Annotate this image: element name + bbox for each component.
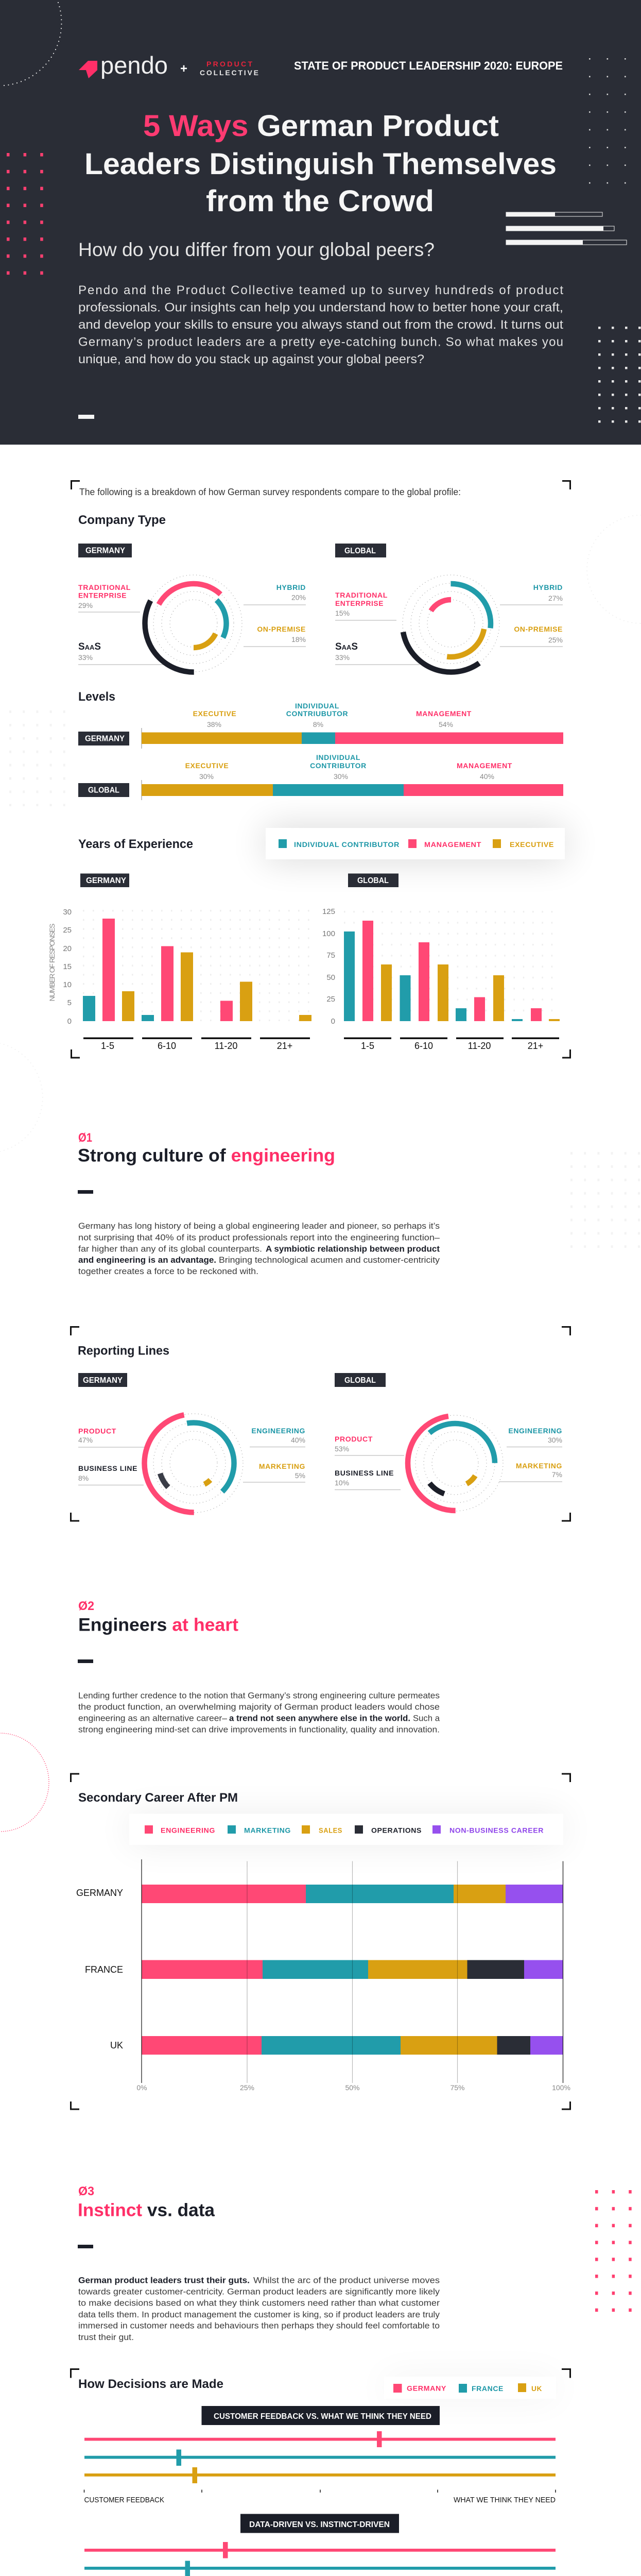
badge: global [335,1373,386,1387]
heading: How Decisions are Made [78,2377,223,2391]
grid and axis [136,1859,570,2092]
dash [78,1659,93,1663]
logo: product collective [200,60,258,77]
labels [335,583,563,662]
uk bar: UK [110,2040,123,2050]
badge: global [348,874,399,887]
badge: germany: GERMANY [83,1376,123,1385]
legend [129,1814,563,1845]
y axis labels: 125 [322,907,335,916]
paragraph: Whilst the arc of the product universe moves [253,2275,440,2285]
labels: 33% [78,653,93,662]
number: Ø2 [78,1599,94,1613]
france bar [85,1960,563,1979]
y axis title: NUMBER OF RESPONSES [48,923,56,1002]
heading: Instinct vs. data [78,2200,215,2221]
intro paragraph [78,283,563,366]
logo: pendo [79,52,187,79]
paragraph: trust their gut. [78,2332,134,2342]
paragraph [78,1221,440,1276]
paragraph: A symbiotic relationship between product [266,1244,440,1254]
labels [335,1427,562,1487]
labels: ENTERPRISE [335,599,384,607]
category axis: 11-20 [468,1041,491,1051]
levels chart: global: 40% [480,772,494,781]
labels: 7% [552,1470,562,1479]
labels: 25% [548,636,563,644]
decorative dotted arc [0,1733,49,1832]
legend: years of experience: EXECUTIVE [510,840,554,849]
labels: TRADITIONAL [335,591,388,599]
y axis labels: 100 [322,929,335,938]
labels: 15% [335,609,350,617]
legend: years of experience: INDIVIDUAL CONTRIBUTOR [294,840,400,849]
paragraph: and engineering is an advantage. [78,1255,216,1265]
levels chart: germany: CONTRIUBUTOR [286,709,348,718]
category axis: 21+ [277,1041,292,1051]
labels: ENGINEERING [508,1427,562,1435]
levels chart: germany: EXECUTIVE [193,709,236,718]
legend: ENGINEERING [161,1826,215,1834]
paragraph: data tells them. In product management the customer is king, so if product leaders are truly [78,2310,440,2319]
labels: PRODUCT [335,1435,373,1443]
germany bar: GERMANY [76,1888,123,1898]
badge: global: GLOBAL [357,876,389,885]
legend: FRANCE [472,2384,504,2393]
paragraph: strong engineering mind-set can drive improvements in functionality, quality and innovation. [78,1725,440,1734]
legend: years of experience: MANAGEMENT [424,840,481,849]
labels: 29% [78,601,93,609]
labels: 10% [335,1479,349,1487]
badge: global: GLOBAL [344,1376,376,1385]
labels [78,583,306,662]
legend: SALES [319,1826,342,1834]
grid and axis: 50% [345,2083,360,2092]
intro paragraph: unique, and how do you stack up against your global peers? [78,352,424,366]
paragraph: Lending further credence to the notion that Germany’s strong engineering culture permeates [78,1691,440,1700]
grid and axis: 25% [240,2083,254,2092]
legend: GERMANY [407,2384,446,2393]
y axis labels: 0 [331,1017,335,1026]
heading: Secondary Career After PM [78,1791,238,1805]
levels chart: germany: 54% [439,720,453,728]
labels: TRADITIONAL [78,583,131,591]
labels [78,1427,305,1482]
y axis labels: 50 [326,973,335,982]
grid and axis: 100% [552,2083,570,2092]
section 03 [78,2184,632,2342]
scale chart: customer feedback: CUSTOMER FEEDBACK VS. WHAT WE THINK THEY NEED [214,2412,431,2421]
intro paragraph: professionals. Our insights can help you understand how to better hone your craft, [78,301,563,314]
panel: secondary career [71,1774,570,2109]
section 02 [0,1599,440,1832]
corner brackets [71,481,570,1058]
subtitle: How do you differ from your global peers? [78,239,435,260]
levels chart: global: INDIVIDUAL [316,753,360,761]
paragraph: far higher than any of its global counterparts. [78,1244,262,1254]
intro paragraph: Pendo and the Product Collective teamed up to survey hundreds of product [78,283,563,297]
levels chart: germany: INDIVIDUAL [295,702,339,710]
levels chart: germany: GERMANY [85,735,125,743]
levels chart: germany: 38% [207,720,221,728]
y axis labels: 25 [326,995,335,1004]
panel: reporting lines [71,1327,570,1521]
y axis labels: 15 [63,962,72,971]
paragraph [78,1691,440,1734]
levels chart: global: MANAGEMENT [457,761,512,770]
decorative dots [595,2190,632,2312]
y axis labels: 0 [67,1017,72,1026]
labels: MARKETING [259,1462,305,1470]
heading: Reporting Lines [78,1344,169,1358]
labels: 33% [335,653,350,662]
badge: germany [78,1373,127,1387]
paragraph: Bringing technological acumen and customer-centricity [219,1255,440,1265]
legend [384,2377,556,2399]
badge: germany: GERMANY [86,876,126,885]
paragraph: a trend not seen anywhere else in the world. [229,1714,410,1723]
germany bar [76,1885,563,1903]
labels: ON-PREMISE [514,625,563,633]
paragraph: the product function, an overwhelming majority of German product leaders would chose [78,1702,440,1711]
decorative progress bars [506,212,627,245]
dash [78,2245,93,2248]
badge: germany [78,544,132,557]
levels chart: global [78,753,563,800]
logo: product collective: PRODUCT [206,60,252,68]
labels: 20% [291,594,306,602]
badge: global: GLOBAL [344,547,376,555]
corner brackets [71,1327,570,1521]
panel: demographics [48,481,570,1058]
scale chart: customer feedback: WHAT WE THINK THEY NEED [454,2496,556,2504]
category axis [344,1038,559,1051]
badge: germany: GERMANY [85,546,125,555]
title: Leaders Distinguish Themselves [84,147,557,181]
heading: Engineers at heart [78,1615,238,1635]
labels: ON-PREMISE [257,625,306,633]
y axis labels [63,908,72,1026]
labels: SaaS [335,641,358,652]
category axis [83,1038,310,1051]
badge: global [335,544,386,557]
category axis: 11-20 [215,1041,237,1051]
panel: how decisions are made [71,2369,570,2576]
labels: 40% [291,1436,305,1444]
paragraph: engineering as an alternative career– [78,1714,228,1723]
labels: BUSINESS LINE [78,1464,137,1472]
labels: ENGINEERING [251,1427,305,1435]
levels chart: germany: MANAGEMENT [416,709,472,718]
uk bar [110,2036,563,2055]
labels: BUSINESS LINE [335,1469,394,1477]
scale chart: data driven [84,2514,556,2576]
category axis: 1-5 [101,1041,114,1051]
intro paragraph: Germany’s product leaders are a pretty eye-catching bunch. So what makes you [78,335,563,349]
logo: product collective: COLLECTIVE [200,69,258,77]
levels chart: global: EXECUTIVE [185,761,229,770]
number: Ø1 [78,1131,92,1145]
report label: STATE OF PRODUCT LEADERSHIP 2020: EUROPE [294,59,563,72]
faint background decoration [0,515,641,2576]
bar chart: experience germany [48,908,312,1051]
labels: 53% [335,1445,349,1453]
scale chart: customer feedback: CUSTOMER FEEDBACK [84,2496,164,2504]
heading: company type: Company Type [78,513,166,527]
labels: HYBRID [276,583,306,591]
labels: PRODUCT [78,1427,116,1435]
paragraph: immersed in customer needs and behaviours then perhaps they should feel comfortable to [78,2320,440,2331]
paragraph [78,2275,440,2342]
dash [78,415,94,419]
levels chart: germany: 8% [313,720,323,728]
section 01 [78,1131,440,1276]
scale chart: customer feedback [84,2406,556,2504]
corner brackets [71,1774,570,2109]
donut: company type germany [78,569,306,677]
y axis labels: 10 [63,980,72,989]
paragraph: Such a [413,1714,440,1723]
levels chart: global: CONTRIBUTOR [310,761,367,770]
y axis labels [322,907,335,1026]
legend: NON-BUSINESS CAREER [449,1826,544,1834]
labels: MARKETING [516,1462,562,1470]
dash [78,1190,93,1194]
heading: levels: Levels [78,690,115,704]
y axis labels: 75 [326,951,335,960]
intro paragraph: and develop your skills to ensure you always stand out from the crowd. It turns out [78,318,563,332]
category axis: 1-5 [361,1041,374,1051]
corner brackets [71,2369,570,2576]
paragraph: to make decisions based on what they think customers need rather than what customer [78,2298,440,2308]
logo: pendo: + [180,62,187,76]
title: 5 Ways German Product [143,109,499,143]
labels: 8% [78,1474,89,1482]
scale chart: data driven: DATA-DRIVEN VS. INSTINCT-DRIVEN [249,2520,390,2529]
paragraph: towards greater customer-centricity. German product leaders are significantly more likely [78,2286,440,2297]
intro line: The following is a breakdown of how German survey respondents compare to the global profile: [79,487,461,497]
legend: years of experience [266,828,565,859]
logo: pendo: pendo [100,52,168,79]
donut: reporting global [335,1408,562,1519]
france bar: FRANCE [85,1964,123,1975]
levels chart: global: GLOBAL [88,786,119,794]
levels chart: global: 30% [334,772,348,781]
legend: UK [531,2384,542,2393]
badge: germany [80,874,129,887]
levels chart: germany [78,702,563,749]
labels: ENTERPRISE [78,591,127,600]
paragraph: Germany has long history of being a global engineering leader and pioneer, so perhaps it’s [78,1221,440,1231]
grid and axis: 75% [450,2083,465,2092]
stacked bar chart [76,1859,570,2092]
labels: HYBRID [533,583,563,591]
header panel [0,0,641,445]
bar chart: experience global [322,907,560,1051]
y axis labels: 25 [63,926,72,935]
labels: 18% [291,635,306,643]
paragraph: not surprising that 40% of its product professionals report into the engineering function– [78,1232,440,1243]
bars [83,919,311,1021]
heading: Strong culture of engineering [78,1146,335,1165]
title: from the Crowd [206,184,434,218]
donut: company type global [335,555,563,691]
category axis: 6-10 [158,1041,176,1051]
labels: SaaS [78,641,101,652]
labels: 5% [295,1471,305,1480]
legend: MARKETING [244,1826,291,1834]
y axis labels: 30 [63,908,72,917]
category axis: 21+ [528,1041,543,1051]
heading: years of experience: Years of Experience [78,837,193,851]
category axis: 6-10 [414,1041,433,1051]
donut: reporting germany [78,1414,305,1513]
labels: 30% [548,1436,562,1444]
y axis labels: 20 [63,944,72,953]
levels chart: global: 30% [199,772,214,781]
title [84,109,557,218]
paragraph: German product leaders trust their guts. [78,2275,250,2285]
paragraph: together creates a force to be reckoned with. [78,1266,258,1276]
labels: 27% [548,594,563,602]
labels: 47% [78,1436,93,1444]
legend: OPERATIONS [371,1826,422,1834]
bars [344,921,560,1021]
y axis labels: 5 [67,998,72,1007]
grid and axis: 0% [136,2083,147,2092]
number: Ø3 [78,2184,94,2198]
